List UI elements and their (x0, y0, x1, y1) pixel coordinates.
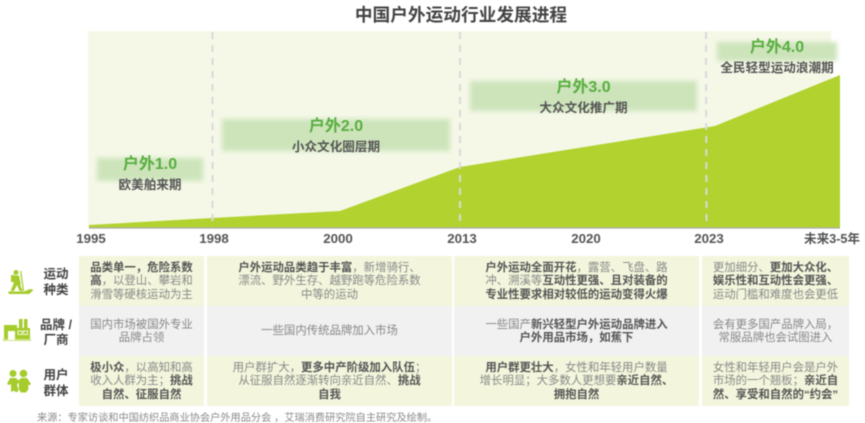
era label: outdoor 3.0 (539, 78, 628, 115)
axis label future: 未来3-5年 (804, 232, 860, 246)
row label: brands and manufacturers (40, 317, 72, 346)
row label: brands and manufacturers: 品牌 / (40, 318, 72, 332)
cell: users 3: 增长明显；大多数人更想要亲近自然、 (480, 375, 673, 387)
row label: user groups (43, 368, 69, 398)
cell: sport types 4: 运动门槛和难度也会更低 (713, 289, 838, 301)
cell: sport types 1: 品类单一，危险系数 (90, 262, 193, 274)
cell: sport types 2: 漂流、野外生存、越野跑等危险系数 (238, 275, 421, 287)
row label: sport types: 运动 (43, 267, 68, 281)
table row: sport types (78, 256, 850, 306)
row label: sport types: 种类 (43, 283, 68, 297)
cell: sport types 1: 滑雪等硬核运动为主 (90, 289, 193, 301)
cell: sport types 4: 娱乐性和互动性会更强、 (713, 275, 838, 287)
cell: users 3: 拥抱自然 (554, 389, 599, 401)
era band: outdoor 4.0 (717, 42, 837, 61)
axis label 2000: 2000 (323, 231, 353, 246)
era label: outdoor 1.0: 户外1.0 (123, 156, 177, 173)
cell: users 4: 然、享受和自然的“约会” (713, 389, 838, 401)
era label: outdoor 2.0 (292, 116, 380, 154)
cell: users 2: 用户群扩大，更多中产阶级加入队伍； (233, 362, 426, 374)
axis label 2013: 2013 (447, 231, 477, 246)
cell: brands 4: 常服品牌也会试图进入 (719, 332, 832, 344)
cell: sport types 2 (207, 256, 452, 306)
cell: users 4 (702, 356, 849, 406)
cell: users 1 (79, 356, 204, 406)
cell: brands 1 (79, 306, 204, 356)
cell: sport types 4 (702, 256, 849, 306)
cell: brands 1: 国内市场被国外专业 (90, 319, 193, 331)
row label: sport types (43, 266, 69, 297)
cell: sport types 3 (454, 256, 699, 306)
cell: brands 3: 户外用品市场，如蕉下 (520, 332, 633, 344)
era label: outdoor 2.0: 户外2.0 (309, 118, 363, 135)
axis label 1995: 1995 (76, 231, 106, 246)
cell: sport types 2: 户外运动品类趋于丰富，新增骑行、 (238, 262, 421, 274)
cell: brands 4 (702, 306, 849, 356)
cell: users 1: 自然、征服自然 (102, 389, 181, 401)
era label: outdoor 3.0: 户外3.0 (556, 79, 611, 96)
axis label 2020: 2020 (571, 231, 601, 246)
era band: outdoor 3.0 (470, 81, 697, 111)
era label: outdoor 1.0: 欧美舶来期 (119, 178, 181, 192)
cell: users 1: 极小众，以高知和高 (90, 362, 193, 374)
cell: users 1: 收入人群为主；挑战 (90, 375, 193, 387)
cell: sport types 1: 高，以登山、攀岩和 (90, 275, 193, 287)
table row: brands (79, 306, 849, 356)
cell: brands 2: 一些国内传统品牌加入市场 (261, 325, 398, 337)
axis label 2023: 2023 (694, 231, 724, 246)
cell: sport types 3: 户外运动全面开花，露营、飞盘、路 (485, 262, 668, 274)
cell: sport types 3: 专业性要求相对较低的运动变得火爆 (485, 289, 668, 301)
era label: outdoor 4.0: 全民轻型运动浪潮期 (720, 61, 834, 75)
cell: users 4: 女性和年轻用户会是户外 (713, 362, 838, 374)
cell: users 3: 用户群更壮大，女性和年轻用户数量 (485, 362, 668, 374)
era band: outdoor 2.0 (222, 119, 450, 151)
cell: brands 2 (207, 306, 452, 356)
area chart: development curve (88, 31, 841, 230)
era label: outdoor 4.0 (720, 38, 834, 75)
title: 中国户外运动行业发展进程 (355, 5, 567, 25)
row label: brands and manufacturers: 厂商 (43, 332, 68, 346)
cell: users 2: 自我 (318, 389, 341, 401)
row label: user groups: 群体 (43, 384, 68, 398)
cell: brands 3: 一些国产新兴轻型户外运动品牌进入 (485, 319, 668, 331)
cell: users 2: 从征服自然逐渐转向亲近自然、挑战 (238, 375, 421, 387)
icon: hiker (8, 269, 34, 295)
era label: outdoor 3.0: 大众文化推广期 (539, 101, 628, 115)
cell: sport types 4: 更加细分、更加大众化、 (713, 262, 838, 274)
era label: outdoor 4.0: 户外4.0 (750, 39, 804, 56)
cell: brands 4: 会有更多国产品牌入局， (713, 319, 838, 331)
cell: users 2 (207, 356, 452, 406)
cell: sport types 2: 中等的运动 (301, 289, 358, 301)
cell: sport types 3: 冲、溯溪等互动性更强、且对装备的 (485, 275, 668, 287)
era band: outdoor 1.0 (97, 158, 203, 181)
icon: user group (6, 369, 32, 394)
cell: sport types 1 (79, 256, 204, 306)
axis label 1998: 1998 (199, 231, 229, 246)
table row: user groups (78, 356, 850, 406)
cell: users 3 (454, 356, 699, 406)
era label: outdoor 1.0 (118, 154, 182, 192)
row label: user groups: 用户 (43, 368, 68, 382)
icon: factory (2, 318, 32, 342)
cell: users 4: 市场的一个翘板；亲近自 (713, 375, 838, 387)
era label: outdoor 2.0: 小众文化圈层期 (292, 140, 380, 154)
cell: brands 1: 品牌占领 (119, 332, 164, 344)
cell: brands 3 (454, 306, 699, 356)
